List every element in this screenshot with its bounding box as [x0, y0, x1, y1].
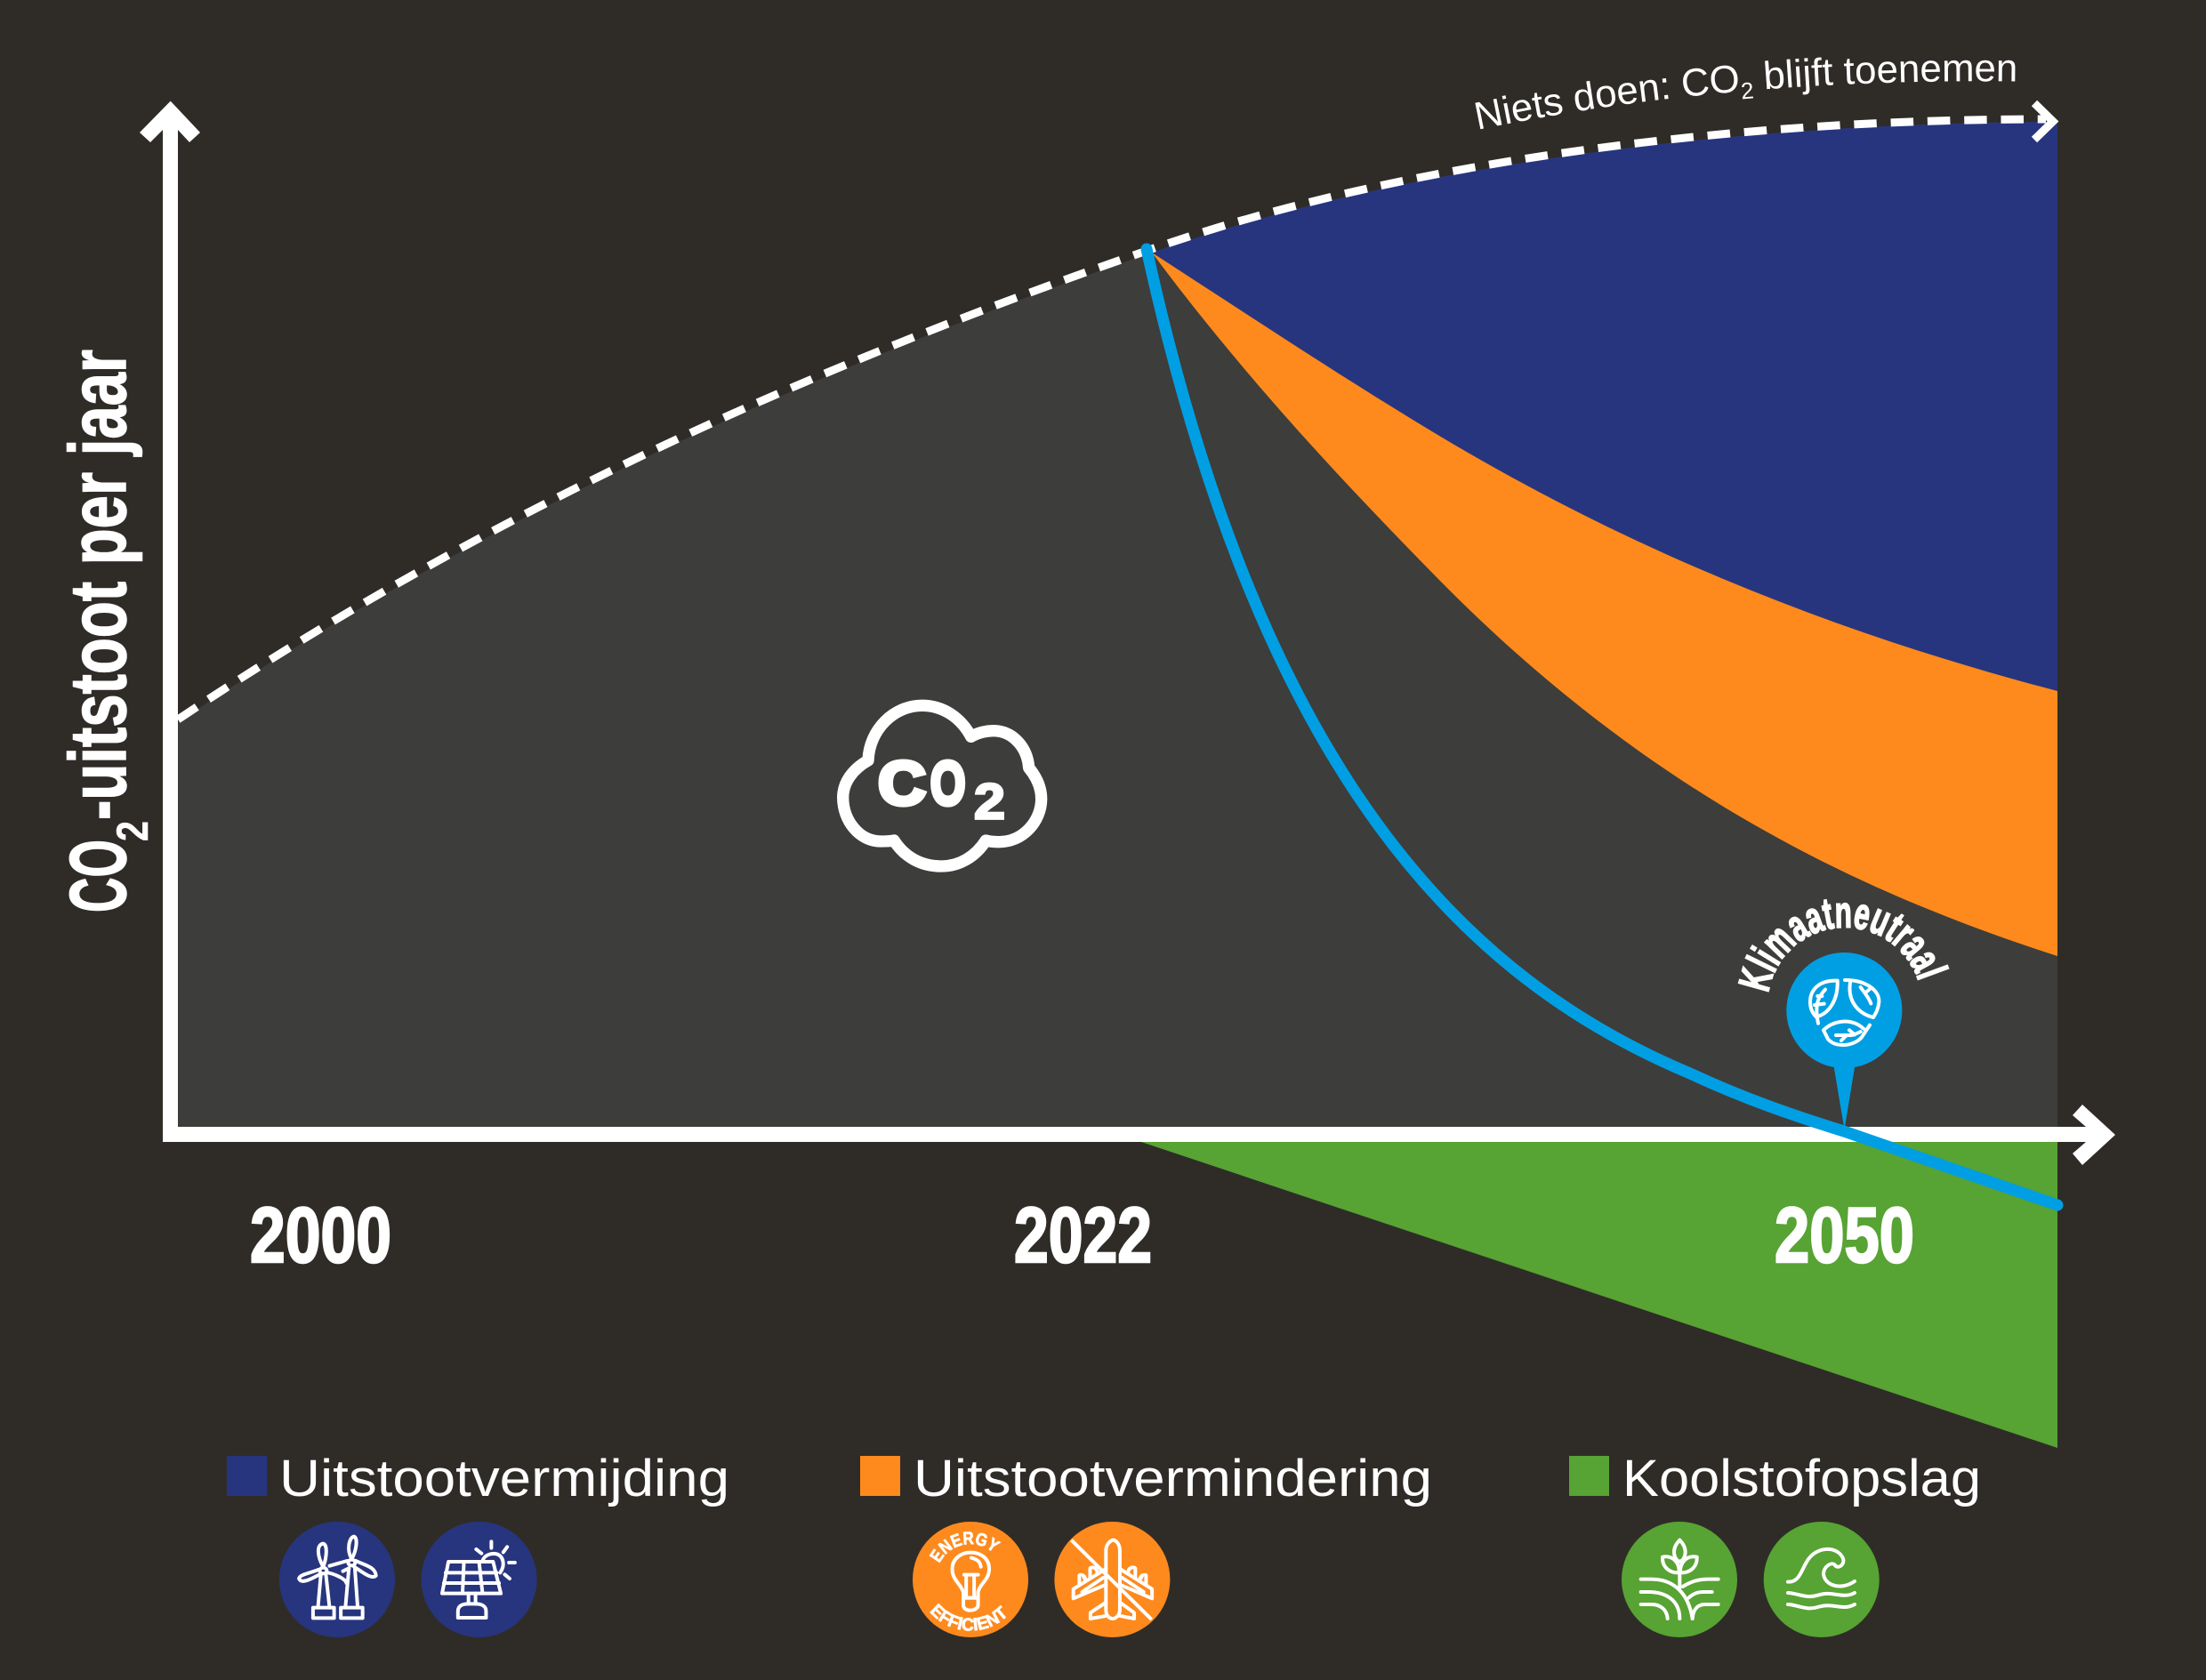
y axis arrow: [140, 101, 200, 1142]
icon: solar panel: [442, 1541, 515, 1618]
icon: wind turbines: [299, 1537, 376, 1618]
icon: CO2 cloud: O: [930, 751, 965, 818]
label: doing nothing: 2: [1742, 82, 1753, 100]
label: Klimaatneutraal: Klimaatneutraal: [1738, 898, 1950, 993]
chart: emissions scenario areas: [178, 122, 2057, 1448]
swatch: [227, 1456, 267, 1496]
year labels: 2050: [1775, 1191, 1914, 1279]
arrowhead: dashed line: [2034, 103, 2053, 140]
circle: energy efficient: [913, 1522, 1028, 1637]
icon: CO2 cloud: [843, 705, 1042, 866]
area: emission avoidance (blue): [1152, 122, 2057, 691]
label: Uitstootvermindering: [914, 1450, 1432, 1507]
legend: Uitstootvermindering: [860, 1450, 1432, 1637]
area: CO2 emissions (grey): [178, 122, 2057, 1127]
circle: wind: [279, 1522, 395, 1637]
swatch: [860, 1456, 900, 1496]
icon: three leaves: [1810, 980, 1879, 1045]
pin: climate neutral marker: [1738, 898, 1950, 1126]
icon: CO2 cloud: 2: [974, 774, 1005, 830]
icon: light bulb: [953, 1553, 989, 1611]
text: EFFICIENT: EFFICIENT: [930, 1603, 1006, 1631]
label: doing nothing: blijft toenemen: [1765, 57, 2016, 94]
dashed line: doing nothing: [178, 119, 2046, 719]
pin body: [1786, 953, 1902, 1129]
circle: no flying: [1054, 1522, 1170, 1637]
year labels: 2022: [1014, 1191, 1152, 1279]
circle: ocean: [1764, 1522, 1880, 1637]
icon: CO2 cloud: C: [878, 751, 926, 818]
legend: Koolstofopslag: [1569, 1450, 1981, 1637]
year labels: 2000: [250, 1191, 391, 1279]
y axis title: [54, 350, 157, 912]
y axis title: CO: [54, 840, 143, 912]
year labels: [250, 1191, 1914, 1279]
icon: ocean wave: [1788, 1549, 1855, 1608]
label: Koolstofopslag: [1622, 1450, 1981, 1507]
text: ENERGY: ENERGY: [929, 1531, 1002, 1563]
y axis title: 2: [108, 821, 157, 841]
circle: soil: [1622, 1522, 1737, 1637]
icon: crossed-out plane: [1071, 1540, 1152, 1620]
x axis arrow: [163, 1105, 2115, 1165]
y axis title: -uitstoot per jaar: [54, 350, 143, 820]
legend: Uitstootvermijding: [227, 1450, 729, 1637]
swatch: [1569, 1456, 1609, 1496]
area: carbon storage (green): [1139, 1141, 2057, 1448]
area: emission reduction (orange): [1152, 253, 2057, 956]
label: Uitstootvermijding: [279, 1450, 729, 1507]
label: doing nothing: Niets doen: CO: [1475, 66, 1738, 130]
blue line: climate neutral pathway: [1147, 249, 2057, 1205]
circle: solar: [422, 1522, 537, 1637]
icon: plant and soil: [1641, 1540, 1719, 1619]
